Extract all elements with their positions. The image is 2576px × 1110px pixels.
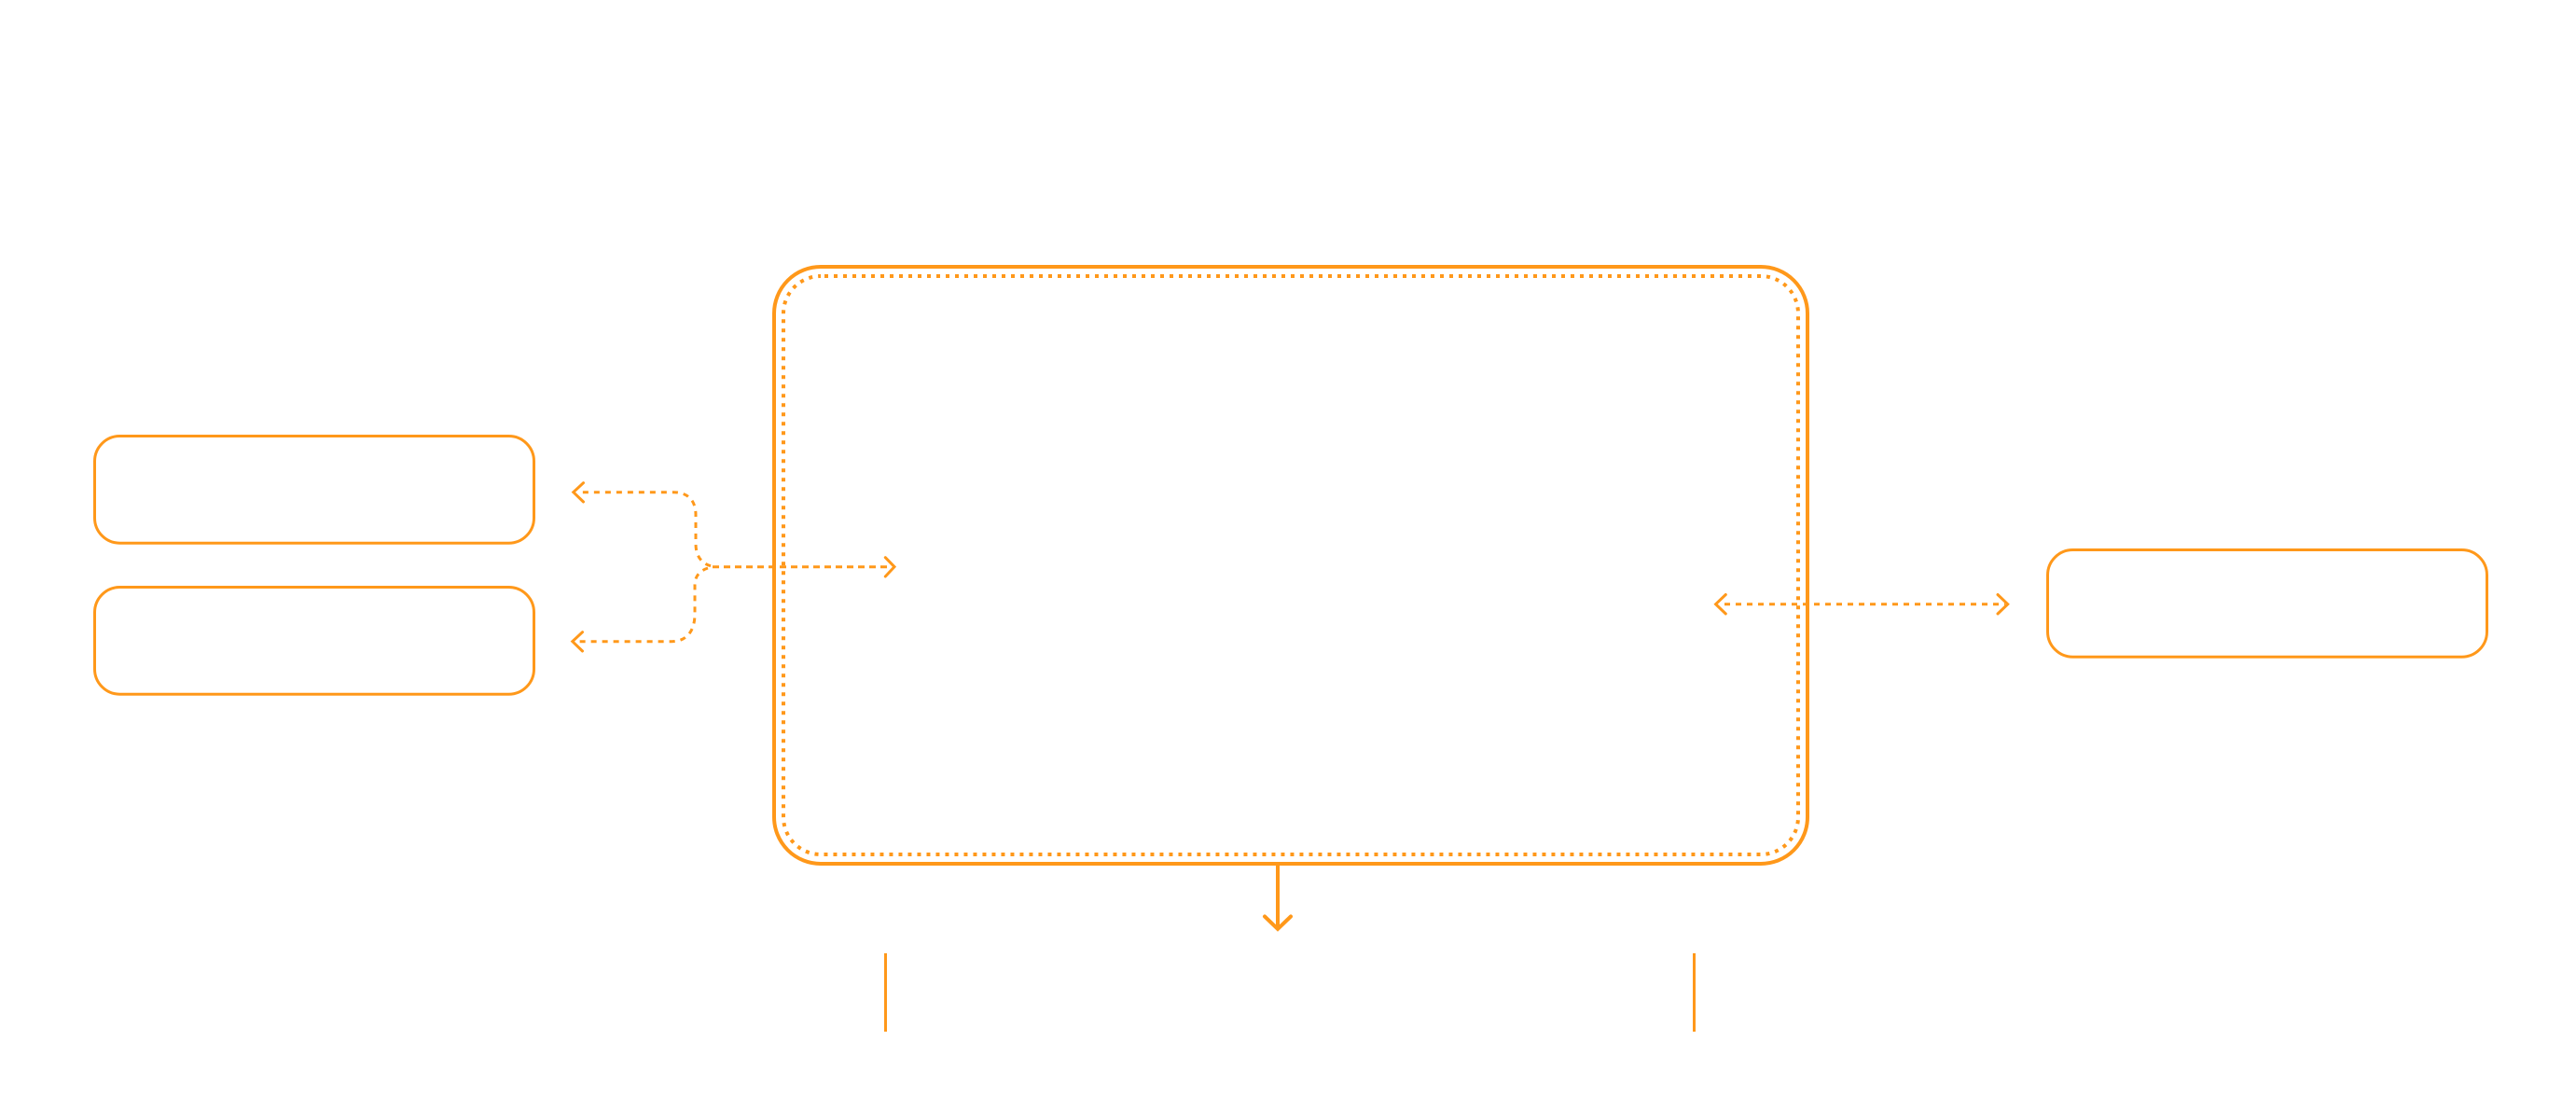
arrow: bracket into central box — [713, 558, 894, 576]
panel: left bottom box — [95, 588, 533, 694]
arrow: two-way central box to right box — [1716, 595, 2008, 614]
panel: left top box — [95, 437, 533, 543]
panel: central box outer border — [774, 267, 1807, 864]
arrow: bracket to left bottom box — [573, 568, 708, 651]
right vertical divider — [1693, 953, 1696, 1032]
arrow: down from central box — [1265, 864, 1291, 929]
arrow: bracket to left top box — [574, 483, 711, 566]
panel: right box — [2048, 550, 2486, 657]
left vertical divider — [884, 953, 887, 1032]
panel: central box dotted inner border — [783, 276, 1798, 854]
